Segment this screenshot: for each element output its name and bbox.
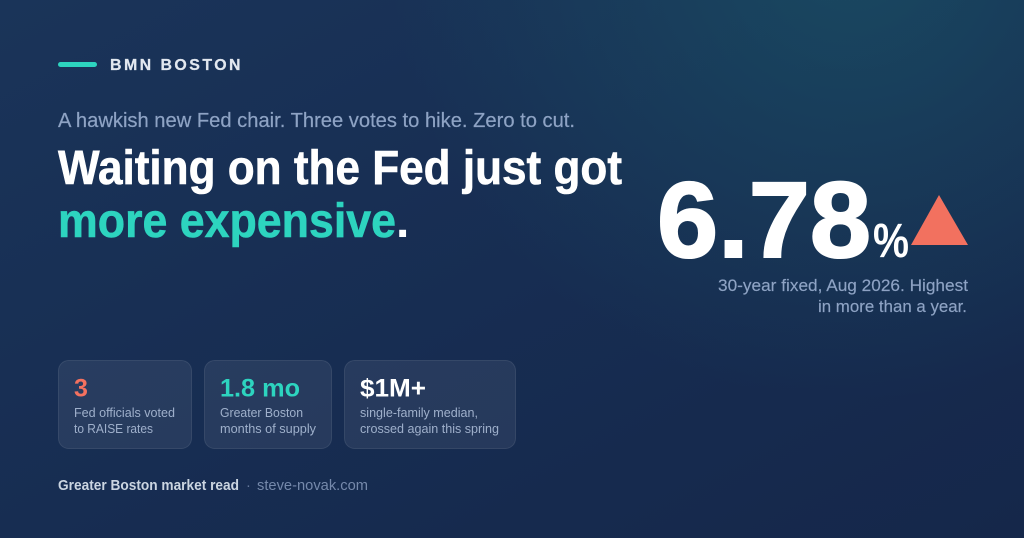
brand eyebrow [58, 57, 243, 74]
rate caption: 30-year fixed, Aug 2026. Highest [718, 277, 968, 295]
stat label: single-family median, [360, 405, 478, 420]
rate caption: in more than a year. [818, 298, 967, 316]
stat label [360, 405, 499, 436]
footer: Greater Boston market read [58, 478, 239, 494]
headline [58, 142, 622, 248]
stat value: 1.8 mo [220, 374, 300, 402]
panel: months of supply stat [204, 360, 332, 448]
stat label: Fed officials voted [74, 405, 175, 420]
stat label: Greater Boston [220, 405, 303, 420]
stat label: to RAISE rates [74, 421, 153, 436]
stat value: 3 [74, 374, 88, 402]
subheading: A hawkish new Fed chair. Three votes to hike. Zero to cut. [58, 109, 575, 132]
accent bar [58, 62, 97, 67]
stat value: $1M+ [360, 374, 426, 402]
big rate figure: 6.78 [657, 159, 871, 280]
stat label [74, 405, 175, 436]
icon: up triangle [911, 195, 968, 245]
footer [58, 478, 368, 494]
panel: Fed officials stat [58, 360, 192, 448]
footer: · [246, 478, 251, 494]
headline: Waiting on the Fed just got [58, 142, 622, 195]
brand name: BMN BOSTON [110, 57, 243, 74]
big rate figure: % [873, 215, 909, 268]
headline: more expensive [58, 195, 396, 248]
stat label: months of supply [220, 421, 316, 436]
stat label [220, 405, 316, 436]
stat label: crossed again this spring [360, 421, 499, 436]
headline: . [396, 195, 409, 248]
rate caption [718, 277, 968, 316]
panel: median price stat [344, 360, 516, 448]
footer: steve-novak.com [257, 478, 368, 494]
